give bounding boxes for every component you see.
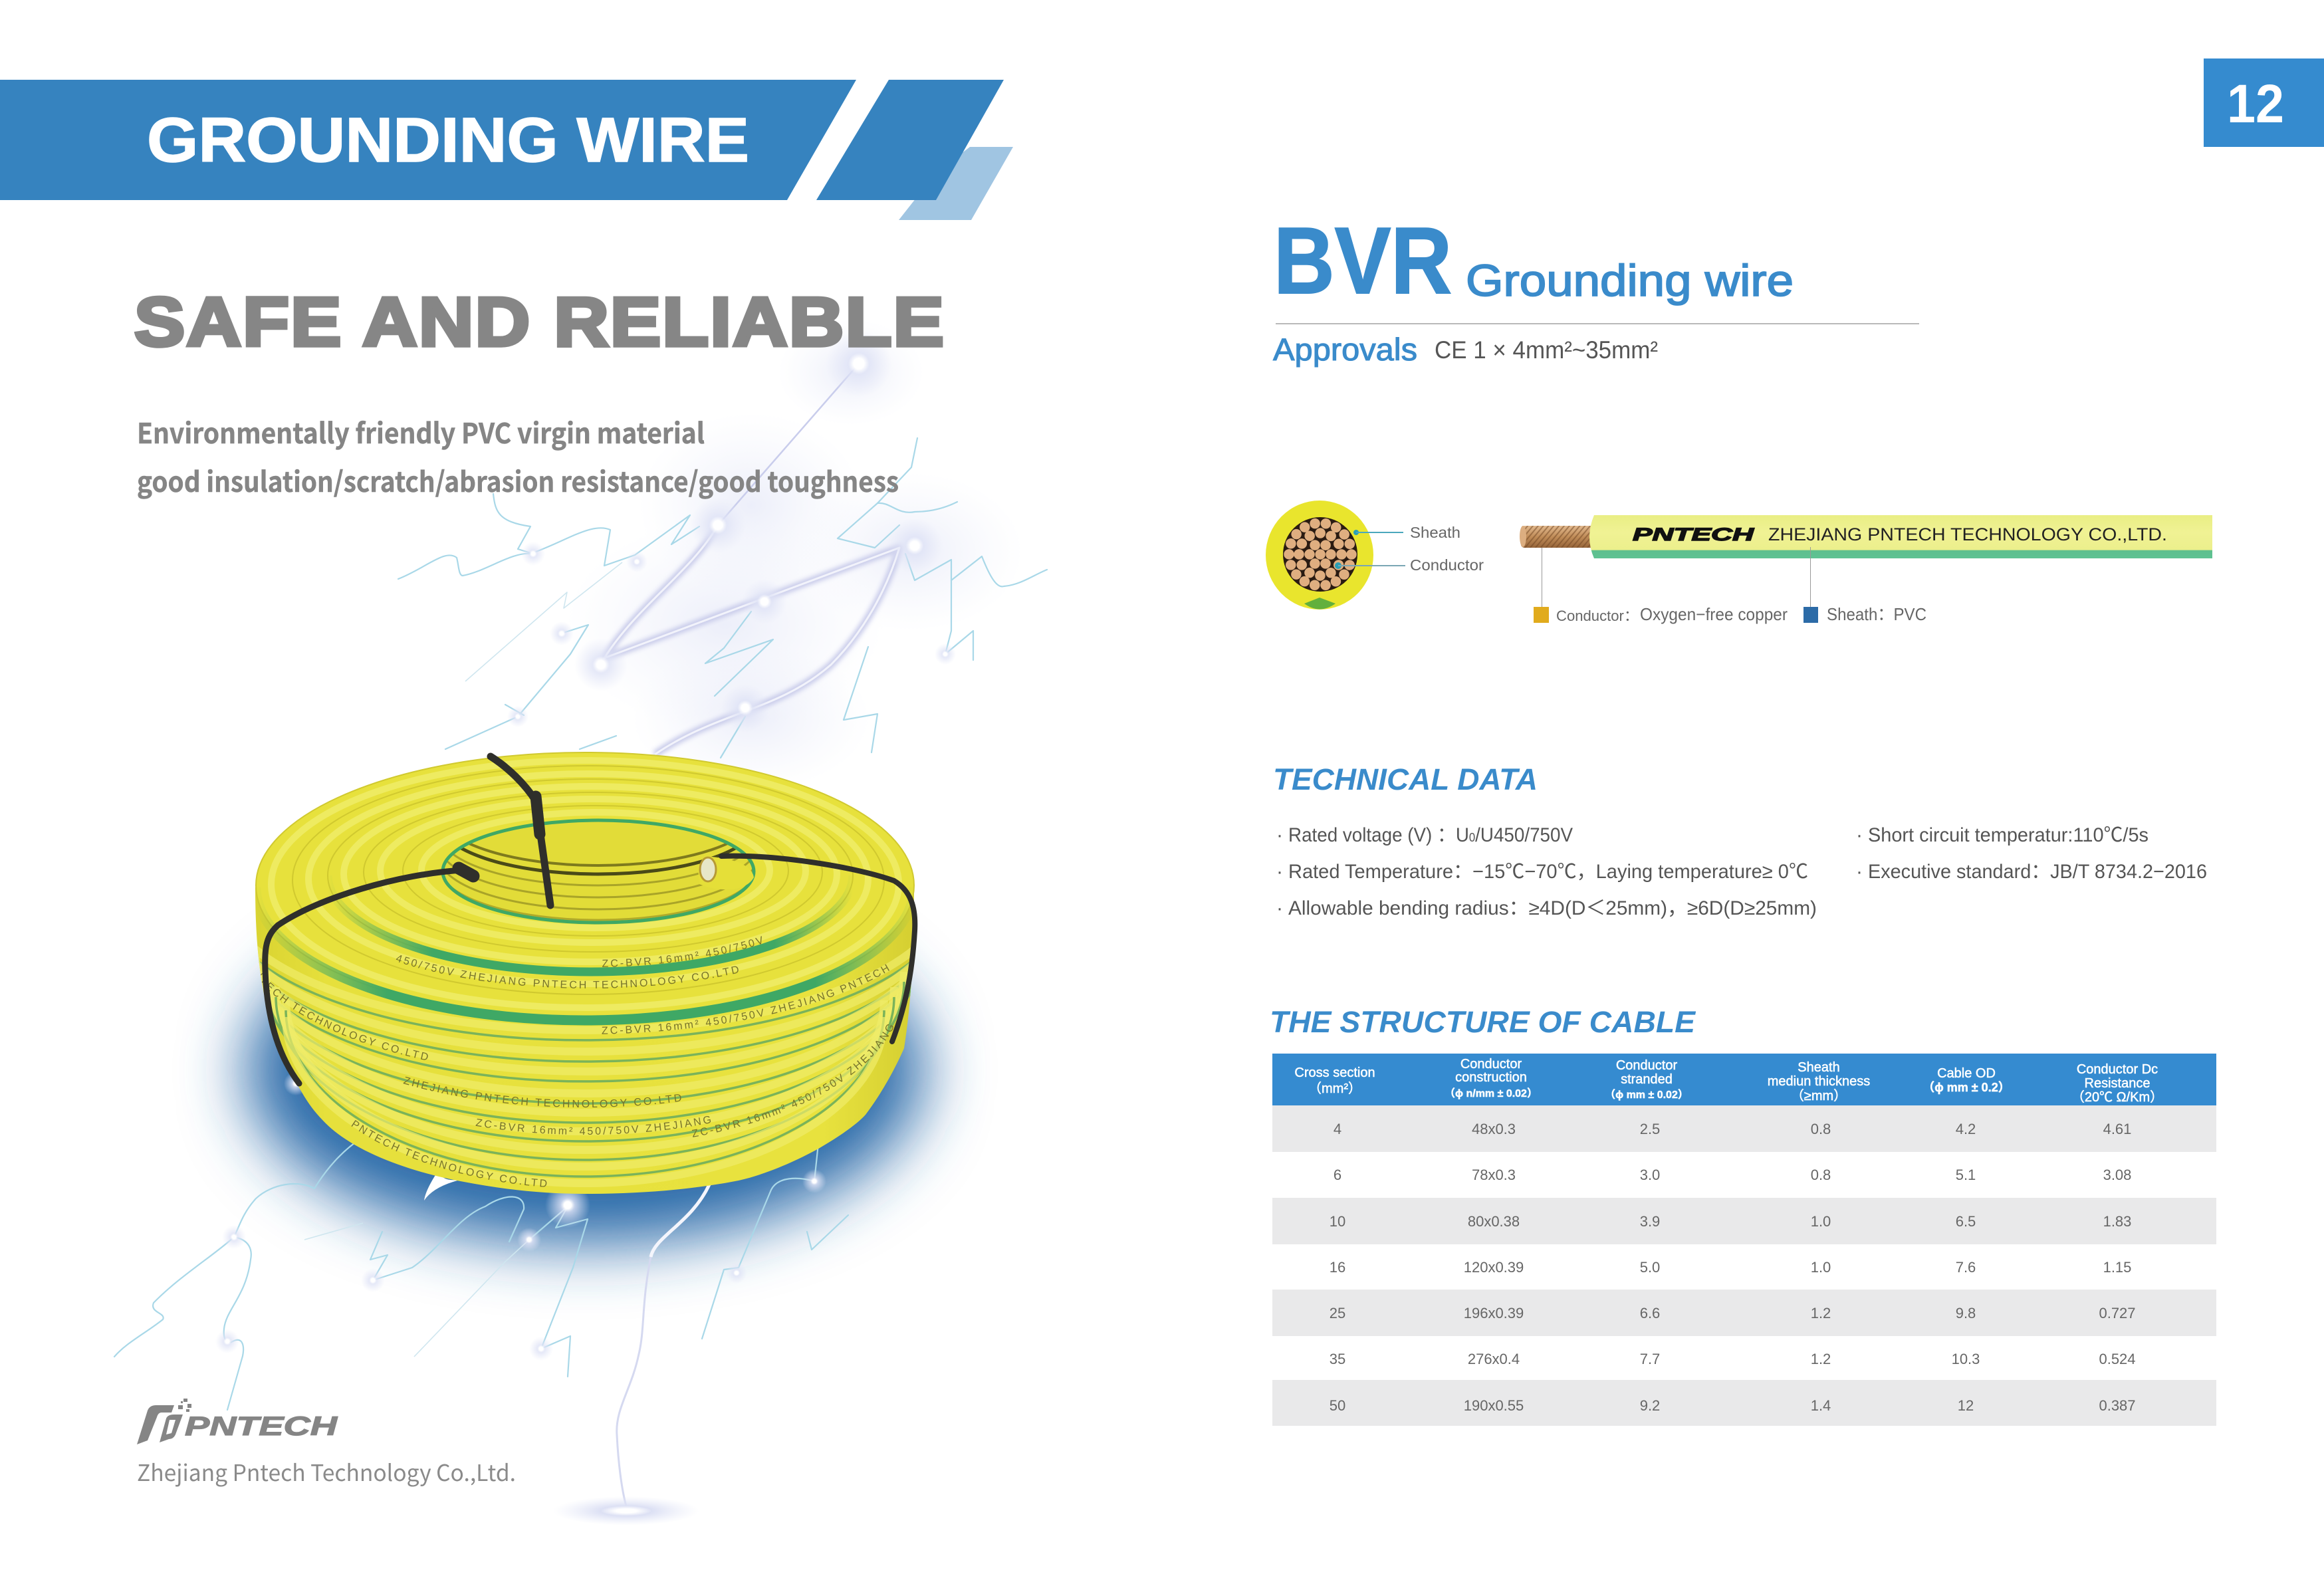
- cable printing: PNTECH TECHNOLOGY CO.LTD: [351, 1120, 546, 1187]
- approvals: [1273, 332, 1658, 367]
- row 25 mm²: 9.8: [1956, 1305, 1976, 1321]
- material legend: Conductor：: [1556, 608, 1639, 624]
- row 25 mm²: [1272, 1290, 2216, 1336]
- row 16 mm²: 1.15: [2103, 1259, 2131, 1276]
- cable printing: ZC-BVR 16mm² 450/750V ZHEJIANG: [692, 1024, 893, 1137]
- table header: stranded: [1621, 1072, 1673, 1087]
- material legend: [1534, 604, 1926, 624]
- row 10 mm²: 10: [1330, 1213, 1345, 1230]
- row 6 mm²: 5.1: [1956, 1167, 1976, 1183]
- coil top rings: ZC-BVR 16mm² 450/750V: [602, 936, 762, 967]
- title banner: [0, 80, 1013, 220]
- row 35 mm²: 1.2: [1811, 1351, 1831, 1367]
- company name: Zhejiang Pntech Technology Co.,Ltd.: [137, 1455, 516, 1488]
- row 10 mm²: 80x0.38: [1468, 1213, 1520, 1230]
- row 6 mm²: 3.0: [1640, 1167, 1660, 1183]
- row 10 mm²: [1272, 1198, 2216, 1244]
- row 4 mm²: 0.8: [1811, 1121, 1831, 1137]
- technical data list: Short circuit temperatur:110℃/5s: [1868, 824, 2149, 846]
- row 6 mm²: 0.8: [1811, 1167, 1831, 1183]
- banner heading: GROUNDING WIRE: [147, 105, 749, 175]
- row 50 mm²: 12: [1958, 1397, 1974, 1414]
- structure heading: THE STRUCTURE OF CABLE: [1270, 1005, 1696, 1039]
- specification table: [1272, 1054, 2216, 1426]
- row 10 mm²: 1.83: [2103, 1213, 2131, 1230]
- row 25 mm²: 196x0.39: [1464, 1305, 1524, 1321]
- cable printing: ZHEJIANG PNTECH TECHNOLOGY CO.LTD: [403, 1077, 681, 1107]
- technical data heading: TECHNICAL DATA: [1273, 762, 1538, 796]
- table header: （mm²）: [1308, 1081, 1361, 1096]
- coil centre hole: [439, 812, 758, 923]
- row 25 mm²: 25: [1330, 1305, 1345, 1321]
- product title: Grounding wire: [1466, 256, 1794, 306]
- table header: （20℃ Ω/Km）: [2071, 1089, 2163, 1105]
- technical data list: ·: [1276, 897, 1283, 919]
- material legend: Oxygen−free copper: [1640, 604, 1788, 624]
- row 4 mm²: 4.61: [2103, 1121, 2131, 1137]
- product title: [1274, 208, 1794, 314]
- table header: [1272, 1054, 2216, 1105]
- page number tab: [2204, 58, 2324, 147]
- material legend: Sheath：PVC: [1827, 604, 1926, 624]
- printed brand: PNTECH: [1633, 524, 1754, 544]
- table header: construction: [1455, 1070, 1527, 1085]
- table header: Cable OD: [1937, 1066, 1996, 1081]
- row 50 mm²: [1272, 1380, 2216, 1426]
- technical data list: Executive standard：JB/T 8734.2−2016: [1868, 861, 2207, 883]
- row 4 mm²: 48x0.3: [1472, 1121, 1516, 1137]
- table header: Cross section: [1294, 1066, 1375, 1080]
- row 6 mm²: 3.08: [2103, 1167, 2131, 1183]
- table header: Conductor Dc: [2077, 1062, 2158, 1077]
- coil top rings: 450/750V ZHEJIANG PNTECH TECHNOLOGY CO.LTD: [396, 955, 739, 988]
- earth stripe wedge: [1304, 598, 1336, 609]
- row 25 mm²: 0.727: [2099, 1305, 2136, 1321]
- technical data list: Rated voltage (V) ：U0/U450/750V: [1288, 824, 1573, 846]
- cable side view: [1520, 515, 2212, 607]
- cable printing: [261, 964, 893, 1187]
- table header: （≥mm）: [1791, 1088, 1847, 1103]
- row 16 mm²: 7.6: [1956, 1259, 1976, 1276]
- row 50 mm²: 50: [1330, 1397, 1345, 1414]
- row 10 mm²: 6.5: [1956, 1213, 1976, 1230]
- row 6 mm²: [1334, 1167, 2131, 1183]
- technical data list: ·: [1856, 861, 1863, 883]
- page number tab: 12: [2227, 74, 2284, 134]
- copper strands: [1289, 523, 1351, 586]
- feature text: Environmentally friendly PVC virgin material: [137, 411, 705, 452]
- table header: （ϕ mm ± 0.02）: [1605, 1089, 1688, 1101]
- coil top rings: [255, 752, 915, 1025]
- table header: Conductor: [1460, 1057, 1522, 1072]
- row 10 mm²: 1.0: [1811, 1213, 1831, 1230]
- conductor callout: [1335, 556, 1484, 574]
- logo wordmark: PNTECH: [185, 1412, 338, 1441]
- technical data list: [1276, 824, 2207, 919]
- row 35 mm²: 35: [1330, 1351, 1345, 1367]
- cable printing: PNTECH TECHNOLOGY CO.LTD: [261, 973, 428, 1060]
- row 50 mm²: 190x0.55: [1464, 1397, 1524, 1414]
- row 16 mm²: 5.0: [1640, 1259, 1660, 1276]
- table header: （ϕ n/mm ± 0.02）: [1445, 1087, 1538, 1099]
- row 4 mm²: 2.5: [1640, 1121, 1660, 1137]
- technical data list: ·: [1276, 824, 1283, 846]
- row 35 mm²: 10.3: [1952, 1351, 1980, 1367]
- row 4 mm²: 4: [1334, 1121, 1341, 1137]
- approvals: CE 1 × 4mm²~35mm²: [1435, 336, 1658, 364]
- headline: SAFE AND RELIABLE: [134, 284, 945, 361]
- cable cross section diagram: [1266, 501, 1484, 610]
- row 50 mm²: 1.4: [1811, 1397, 1831, 1414]
- row 25 mm²: 6.6: [1640, 1305, 1660, 1321]
- technical data list: ·: [1276, 861, 1283, 883]
- table header: Resistance: [2085, 1076, 2150, 1091]
- row 16 mm²: [1330, 1259, 2131, 1276]
- row 35 mm²: [1330, 1351, 2136, 1367]
- light flares: [215, 330, 956, 1526]
- row 25 mm²: 1.2: [1811, 1305, 1831, 1321]
- technical data list: Rated Temperature：−15℃−70℃，Laying temperature≥ 0℃: [1288, 861, 1808, 883]
- row 4 mm²: 4.2: [1956, 1121, 1976, 1137]
- table header: Sheath: [1798, 1060, 1840, 1075]
- cable coil photo: [255, 752, 917, 1194]
- row 16 mm²: 120x0.39: [1464, 1259, 1524, 1276]
- yellow green sheath: [1589, 515, 2212, 558]
- cable printing: ZC-BVR 16mm² 450/750V ZHEJIANG PNTECH: [602, 964, 889, 1034]
- row 35 mm²: 276x0.4: [1468, 1351, 1520, 1367]
- cable ties: [265, 756, 915, 1083]
- technical data list: Allowable bending radius：≥4D(D＜25mm)，≥6D(D≥25mm): [1288, 897, 1817, 919]
- row 35 mm²: 7.7: [1640, 1351, 1660, 1367]
- row 4 mm²: [1272, 1105, 2216, 1152]
- conductor callout: Conductor: [1410, 556, 1484, 574]
- sheath callout: Sheath: [1410, 524, 1460, 541]
- row 50 mm²: 0.387: [2099, 1397, 2136, 1414]
- cable end: [698, 856, 754, 889]
- coil side rows: [255, 887, 914, 1194]
- feature text: [137, 411, 899, 501]
- lightning illustration: [114, 319, 1047, 1526]
- row 16 mm²: 1.0: [1811, 1259, 1831, 1276]
- approvals: Approvals: [1273, 332, 1417, 367]
- cable printing: ZC-BVR 16mm² 450/750V ZHEJIANG: [476, 1116, 711, 1135]
- blue glow under coil: [246, 896, 924, 1244]
- row 6 mm²: 78x0.3: [1472, 1167, 1516, 1183]
- row 50 mm²: 9.2: [1640, 1397, 1660, 1414]
- technical data list: ·: [1856, 824, 1863, 846]
- product title: BVR: [1274, 208, 1452, 314]
- feature text: good insulation/scratch/abrasion resistance/good toughness: [137, 460, 899, 501]
- printed company name: ZHEJIANG PNTECH TECHNOLOGY CO.,LTD.: [1768, 524, 2167, 544]
- row 35 mm²: 0.524: [2099, 1351, 2136, 1367]
- table header: Conductor: [1616, 1058, 1677, 1073]
- row 6 mm²: 6: [1334, 1167, 1341, 1183]
- table header: mediun thickness: [1768, 1074, 1870, 1089]
- row 16 mm²: 16: [1330, 1259, 1345, 1276]
- stripped copper conductor: [1520, 526, 1595, 548]
- row 10 mm²: 3.9: [1640, 1213, 1660, 1230]
- table header: （ϕ mm ± 0.2）: [1922, 1081, 2010, 1094]
- sheath callout: [1353, 524, 1460, 541]
- company logo: [137, 1399, 338, 1444]
